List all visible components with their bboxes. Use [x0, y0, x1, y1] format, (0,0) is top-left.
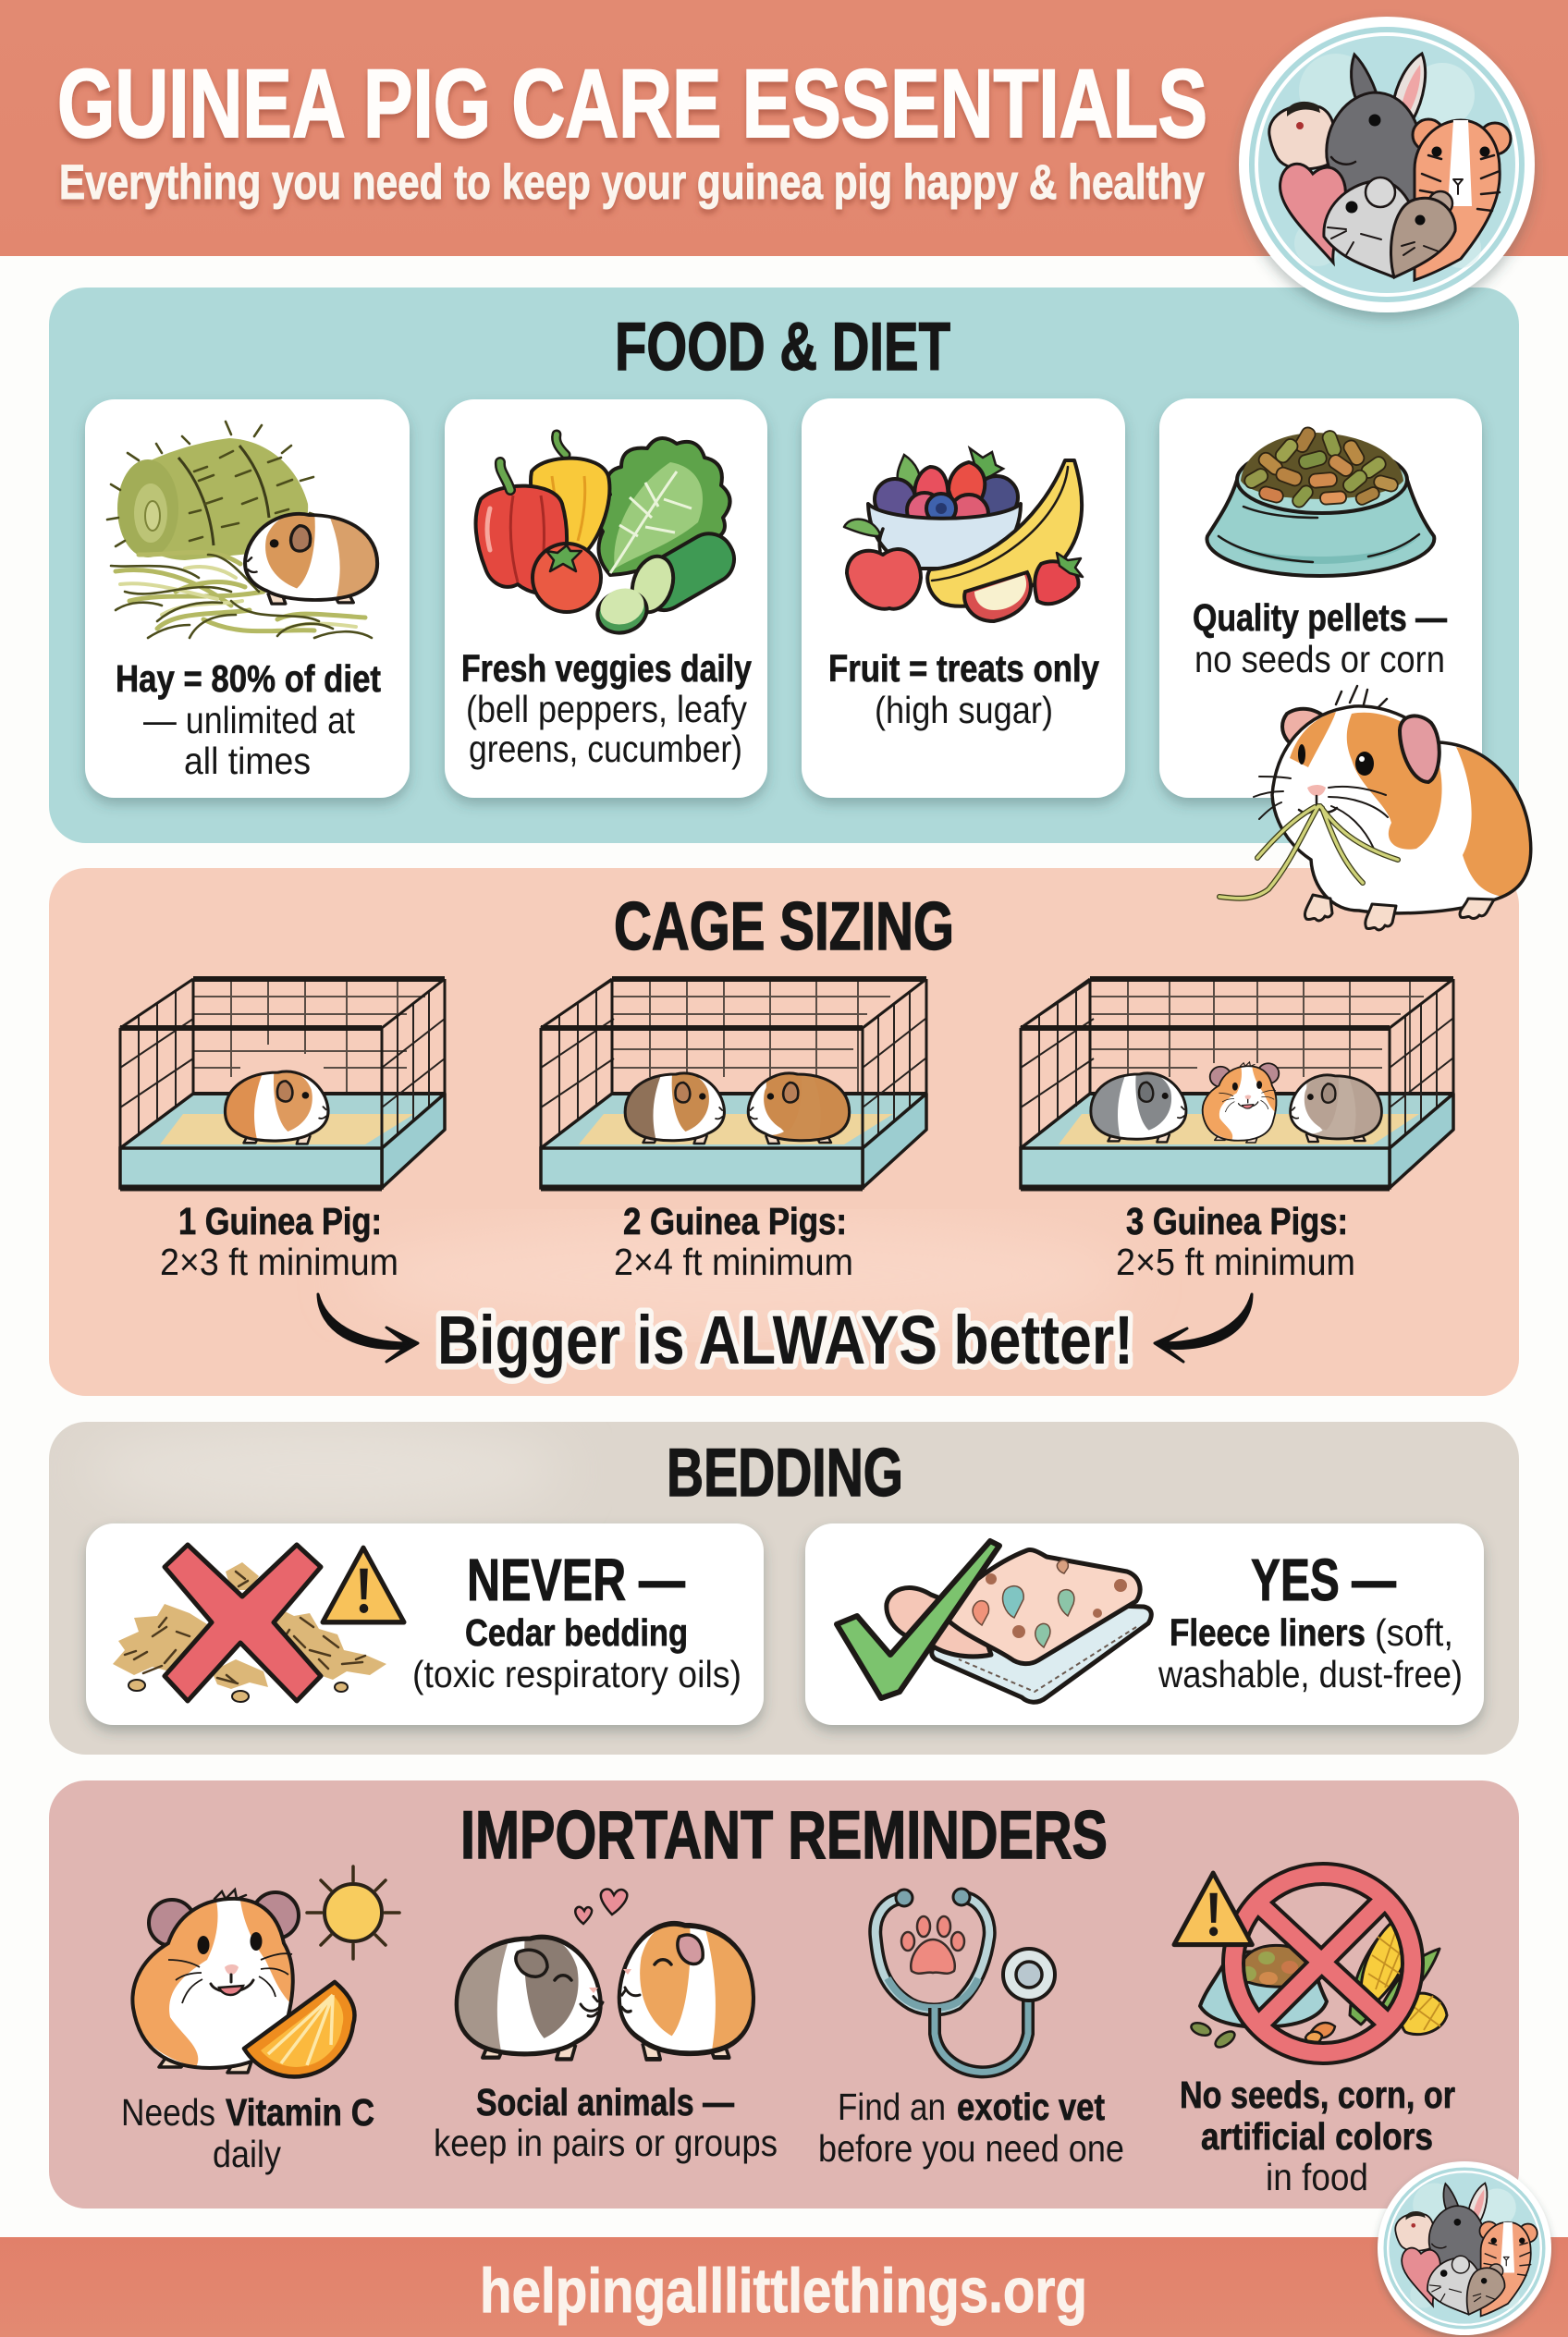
icon: fruit	[844, 448, 1083, 621]
panel: important reminders	[49, 1780, 1519, 2209]
text: vitamin c	[121, 2091, 374, 2175]
icon: two guinea pigs with hearts	[446, 1889, 764, 2061]
text: never	[412, 1547, 741, 1695]
text: never: Cedar bedding	[465, 1611, 688, 1654]
reminder: vitamin c	[121, 1866, 399, 2175]
callout: bigger is always better: Bigger is ALWAYS better!	[437, 1302, 1133, 1378]
icon: header badge	[1239, 17, 1535, 312]
text: yes: YES —	[1251, 1547, 1396, 1613]
text: exotic vet: exotic vet	[957, 2086, 1105, 2128]
text: never: (toxic respiratory oils)	[412, 1653, 741, 1695]
illustration: guinea pig eating hay	[1219, 686, 1531, 930]
text: exotic vet: Find an	[838, 2086, 946, 2128]
text: no seeds or corn: No seeds, corn, or	[1180, 2074, 1455, 2116]
cage: three guinea pigs	[1021, 979, 1453, 1188]
card: fruit	[802, 398, 1125, 798]
reminder: exotic vet	[818, 1889, 1124, 2170]
card: hay	[85, 399, 410, 798]
text: yes	[1158, 1547, 1463, 1695]
reminder: social animals	[434, 1889, 778, 2164]
cage: one guinea pig	[120, 979, 445, 1188]
card: veggies	[445, 399, 767, 798]
text: pellets: no seeds or corn	[1194, 638, 1445, 680]
card: yes fleece	[805, 1523, 1484, 1725]
text: hay: — unlimited at	[143, 699, 356, 741]
label: one guinea pig	[160, 1200, 398, 1283]
text: social animals	[434, 2081, 778, 2164]
text: hay	[116, 657, 381, 782]
card: never cedar	[86, 1523, 764, 1725]
panel: cage sizing	[49, 868, 1519, 1396]
label: one guinea pig: 2×3 ft minimum	[160, 1241, 398, 1283]
label: one guinea pig: 1 Guinea Pig:	[178, 1200, 382, 1242]
text: no seeds or corn: in food	[1266, 2156, 1368, 2198]
header banner	[0, 0, 1568, 256]
icon: footer badge	[1378, 2161, 1551, 2335]
label: two guinea pigs: 2×4 ft minimum	[614, 1241, 853, 1283]
text: no seeds or corn: artificial colors	[1201, 2115, 1433, 2158]
heading: bedding: BEDDING	[667, 1436, 903, 1511]
icon: pellet bowl	[1207, 425, 1434, 576]
icon: guinea pig with sun and orange	[132, 1866, 399, 2076]
text: veggies: greens, cucumber)	[469, 728, 742, 770]
icon: vegetables	[476, 434, 742, 639]
website url: helpingalllittlethings.org	[480, 2256, 1087, 2326]
label: three guinea pigs: 3 Guinea Pigs:	[1126, 1200, 1348, 1242]
text: exotic vet: before you need one	[818, 2127, 1124, 2170]
text: yes: Fleece liners	[1170, 1611, 1366, 1654]
text: pellets: Quality pellets —	[1193, 596, 1447, 639]
label: three guinea pigs: 2×5 ft minimum	[1116, 1241, 1355, 1283]
heading: important reminders: IMPORTANT REMINDERS	[460, 1798, 1108, 1873]
label: three guinea pigs	[1116, 1200, 1355, 1283]
arrow: left	[318, 1294, 418, 1362]
text: never: NEVER —	[467, 1547, 685, 1613]
cage: two guinea pigs	[541, 979, 926, 1188]
text: hay: Hay = 80% of diet	[116, 657, 381, 700]
text: no seeds or corn	[1180, 2074, 1455, 2198]
text: social animals: Social animals —	[476, 2081, 734, 2123]
text: pellets	[1193, 596, 1447, 680]
arrow: right	[1155, 1294, 1252, 1362]
heading: cage sizing: CAGE SIZING	[614, 889, 954, 964]
text: exotic vet	[818, 2086, 1124, 2170]
title: GUINEA PIG CARE ESSENTIALS	[57, 50, 1207, 158]
text: fruit: (high sugar)	[875, 689, 1053, 731]
text: fruit: Fruit = treats only	[828, 647, 1099, 690]
card: pellets	[1159, 398, 1482, 798]
label: two guinea pigs: 2 Guinea Pigs:	[623, 1200, 847, 1242]
icon: cedar shavings crossed out	[113, 1545, 404, 1702]
text: veggies: (bell peppers, leafy	[466, 688, 747, 730]
text: yes: washable, dust-free)	[1158, 1653, 1463, 1695]
icon: hay bale with guinea pig	[107, 422, 387, 638]
text: hay: all times	[184, 740, 311, 782]
icon: prohibited seeds and corn	[1174, 1873, 1447, 2053]
subtitle: Everything you need to keep your guinea pig happy & healthy	[59, 155, 1205, 210]
panel: food and diet	[49, 288, 1519, 843]
text: fruit	[828, 647, 1099, 731]
panel: bedding	[49, 1422, 1519, 1755]
footer banner	[0, 2237, 1568, 2337]
text: yes: (soft,	[1375, 1611, 1453, 1654]
text: social animals: keep in pairs or groups	[434, 2122, 778, 2164]
text: vitamin c: daily	[213, 2133, 281, 2175]
text: vitamin c: Needs	[121, 2091, 215, 2134]
text: veggies: Fresh veggies daily	[461, 647, 752, 690]
text: vitamin c: Vitamin C	[226, 2091, 374, 2134]
heading: food and diet: FOOD & DIET	[615, 310, 950, 385]
reminder: no seeds or corn	[1174, 1873, 1455, 2198]
icon: fleece liner with check mark	[837, 1541, 1151, 1702]
label: two guinea pigs	[614, 1200, 853, 1283]
text: veggies	[461, 647, 752, 770]
icon: stethoscope with paw	[876, 1889, 1055, 2072]
